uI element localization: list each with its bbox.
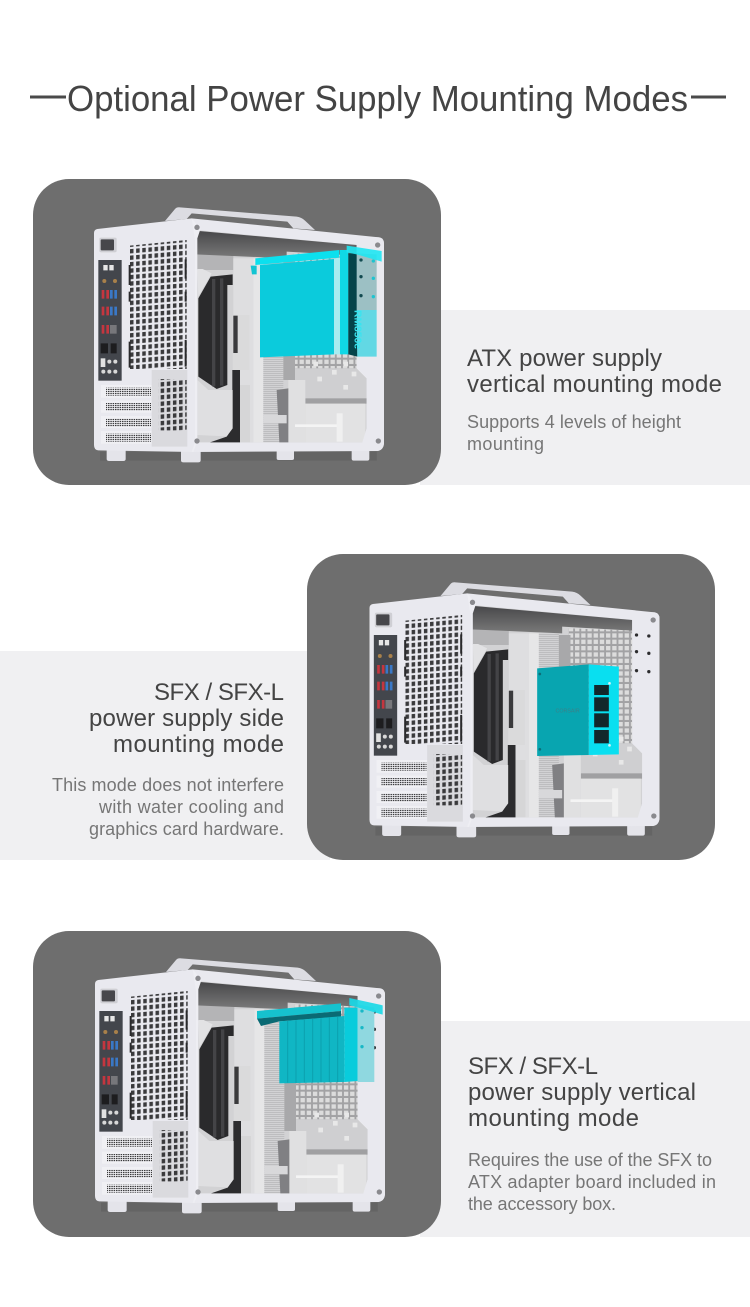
ATX mode description: mounting xyxy=(467,434,544,454)
panel: ATX vertical mounting mode xyxy=(33,179,750,485)
SFX side mode description: This mode does not interfere xyxy=(52,775,284,795)
SFX vertical mode heading: power supply vertical xyxy=(468,1079,696,1106)
vertical SFX power supply with adapter xyxy=(257,998,383,1083)
ATX power supply unit xyxy=(251,246,382,357)
title: Optional Power Supply Mounting Modes xyxy=(67,78,688,119)
ATX mode description xyxy=(467,412,681,454)
SFX vertical mode heading xyxy=(468,1053,696,1132)
SFX side mode heading xyxy=(89,679,284,758)
SFX vertical mode description: ATX adapter board included in xyxy=(468,1172,716,1192)
SFX vertical mode description: Requires the use of the SFX to xyxy=(468,1150,712,1170)
SFX side mode heading: mounting mode xyxy=(113,731,284,758)
ATX mode heading: vertical mounting mode xyxy=(467,371,722,398)
case illustration with SFX power supply xyxy=(369,582,659,837)
ATX mode heading: ATX power supply xyxy=(467,345,662,372)
panel: SFX side mounting mode xyxy=(0,554,715,860)
ATX mode description: Supports 4 levels of height xyxy=(467,412,681,432)
SFX power supply unit xyxy=(537,664,619,756)
SFX side mode description: graphics card hardware. xyxy=(89,819,284,839)
dark image card xyxy=(33,179,441,485)
panel: SFX vertical mounting mode xyxy=(33,931,750,1237)
SFX vertical mode description xyxy=(468,1150,716,1214)
SFX power supply unit: CORSAIR xyxy=(555,709,580,715)
ATX power supply unit: RM850e xyxy=(351,310,362,349)
case illustration with SFX vertical power supply xyxy=(95,958,385,1213)
SFX vertical mode heading: mounting mode xyxy=(468,1105,639,1132)
SFX side mode description xyxy=(52,775,284,839)
case illustration with ATX power supply xyxy=(94,207,384,462)
SFX vertical mode heading: SFX / SFX-L xyxy=(468,1053,598,1080)
ATX mode heading xyxy=(467,345,722,398)
SFX vertical mode description: the accessory box. xyxy=(468,1194,616,1214)
dark image card xyxy=(307,554,715,860)
SFX side mode heading: SFX / SFX-L xyxy=(154,679,284,706)
dark image card xyxy=(33,931,441,1237)
SFX side mode description: with water cooling and xyxy=(98,797,284,817)
SFX side mode heading: power supply side xyxy=(89,705,284,732)
